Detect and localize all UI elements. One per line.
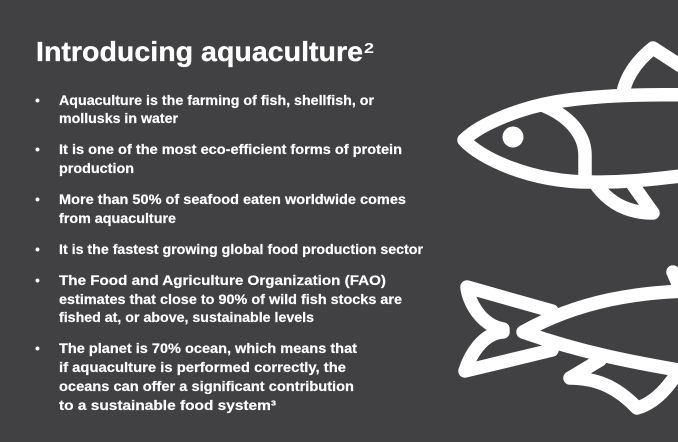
bullet: FAO estimate: fished at, or above, sustainable levels — [59, 310, 314, 325]
bullet: 50% of seafood — [35, 191, 406, 226]
bullet list — [35, 92, 424, 413]
bullet: 70% ocean: to a sustainable food system³ — [59, 398, 277, 413]
bullet: eco-efficient: • — [35, 141, 40, 157]
bullet: 70% ocean: • — [35, 340, 40, 356]
bullet: FAO estimate: • — [35, 272, 40, 288]
bullet: eco-efficient: It is one of the most eco-efficient forms of protein — [59, 142, 402, 157]
bullet: FAO estimate: estimates that close to 90% of wild fish stocks are — [59, 292, 402, 307]
icon: bottom fish — [465, 272, 678, 408]
bullet: farming definition: Aquaculture is the farming of fish, shellfish, or — [59, 93, 375, 108]
bullet: FAO estimate — [35, 272, 402, 325]
bullet: farming definition — [35, 92, 375, 126]
bullet: eco-efficient — [35, 141, 402, 176]
bullet: farming definition: mollusks in water — [59, 111, 179, 126]
bullet: 70% ocean: if aquaculture is performed correctly, the — [59, 360, 346, 375]
icon: top fish — [464, 48, 678, 213]
bullet: fastest growing: It is the fastest growing global food production sector — [59, 242, 424, 257]
title: 2 — [364, 40, 374, 57]
bullet: 50% of seafood: • — [35, 191, 40, 207]
bullet: 50% of seafood: from aquaculture — [59, 211, 176, 226]
bullet: 70% ocean — [35, 340, 357, 413]
bullet: farming definition: • — [35, 92, 40, 108]
title: Introducing aquaculture — [36, 36, 363, 67]
bullet: eco-efficient: production — [59, 161, 134, 176]
bullet: fastest growing: • — [35, 241, 40, 257]
bullet: 50% of seafood: More than 50% of seafood eaten worldwide comes — [59, 192, 406, 207]
bullet: 70% ocean: The planet is 70% ocean, which means that — [59, 341, 357, 356]
bullet: 70% ocean: oceans can offer a significant contribution — [59, 379, 354, 394]
bullet: FAO estimate: The Food and Agriculture Organization (FAO) — [59, 273, 386, 288]
